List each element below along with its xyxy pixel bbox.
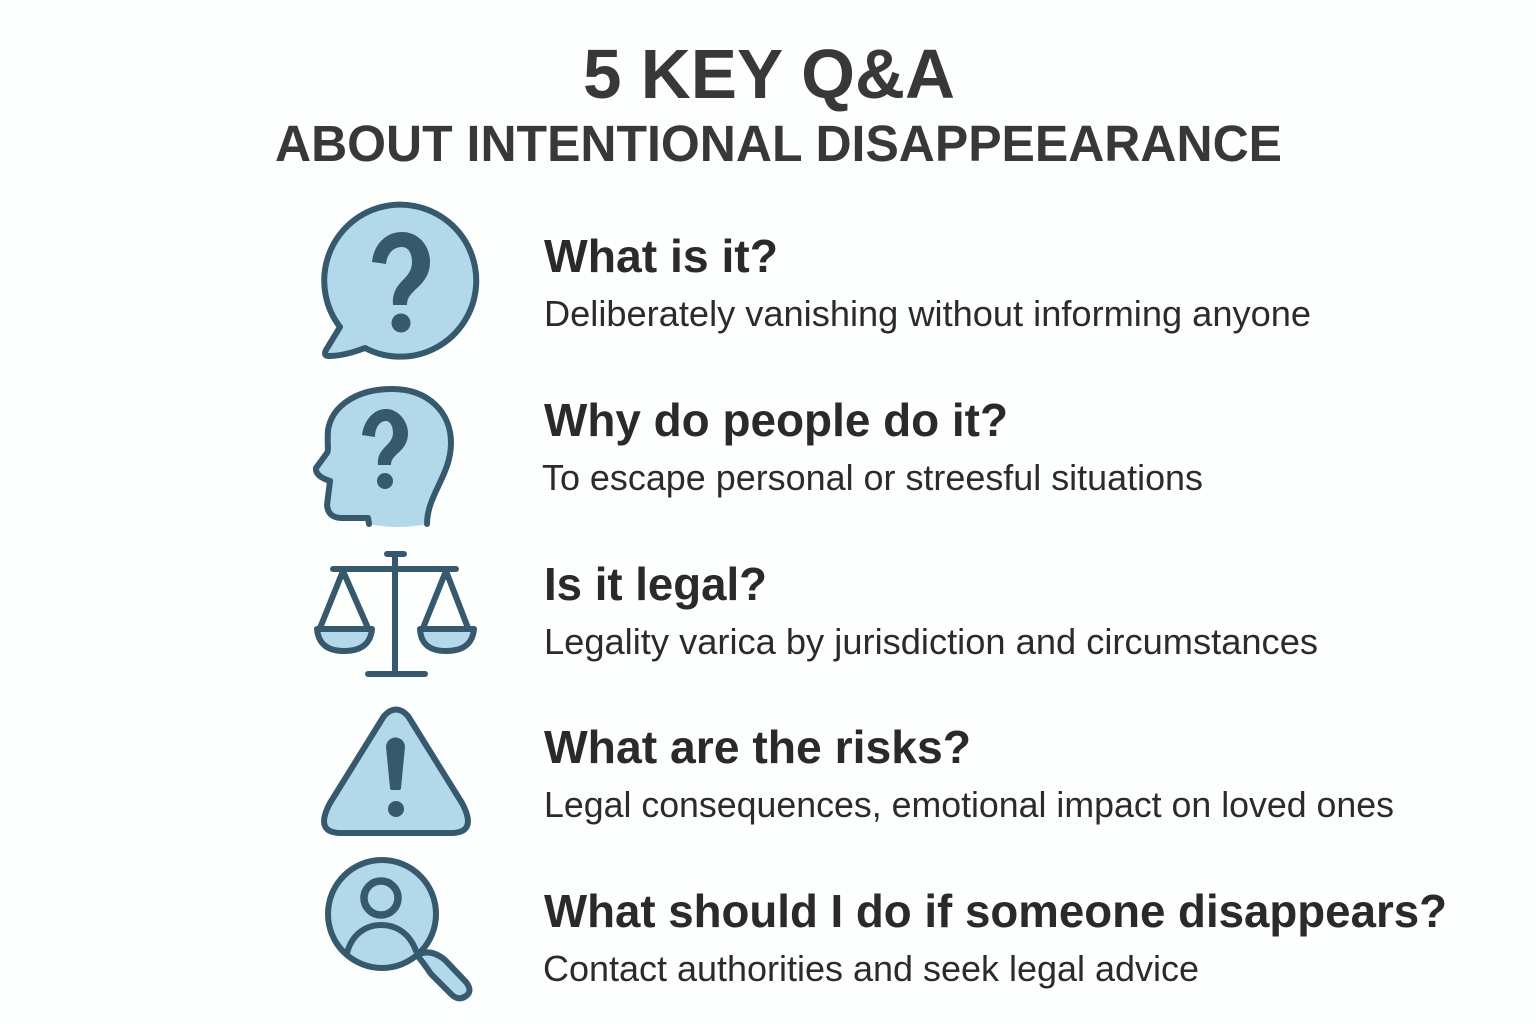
heading: What should I do if someone disappears?: [544, 885, 1447, 937]
icon: head with question mark: [316, 389, 451, 527]
title: [275, 35, 1282, 172]
row 3: is it legal: [317, 554, 1318, 674]
heading: Is it legal?: [544, 558, 767, 610]
description: Deliberately vanishing without informing anyone: [544, 293, 1311, 334]
title: 5 KEY Q&A: [583, 35, 955, 113]
subtitle: ABOUT INTENTIONAL DISAPPEEARANCE: [275, 115, 1282, 172]
heading: What are the risks?: [544, 721, 971, 773]
row 4: what are the risks: [324, 710, 1394, 833]
row 5: what should I do: [328, 860, 1447, 998]
description: Legal consequences, emotional impact on loved ones: [544, 784, 1394, 825]
heading: Why do people do it?: [544, 394, 1008, 446]
description: Contact authorities and seek legal advice: [543, 948, 1199, 989]
description: To escape personal or streesful situations: [542, 457, 1203, 498]
heading: What is it?: [544, 230, 778, 282]
row 2: why do people do it: [316, 389, 1203, 527]
icon: warning triangle: [324, 710, 468, 833]
row 1: what is it: [324, 205, 1311, 357]
icon: magnifier with person: [328, 860, 470, 998]
icon: speech bubble question: [324, 205, 476, 357]
icon: scales of justice: [317, 554, 474, 674]
description: Legality varica by jurisdiction and circumstances: [544, 621, 1318, 662]
